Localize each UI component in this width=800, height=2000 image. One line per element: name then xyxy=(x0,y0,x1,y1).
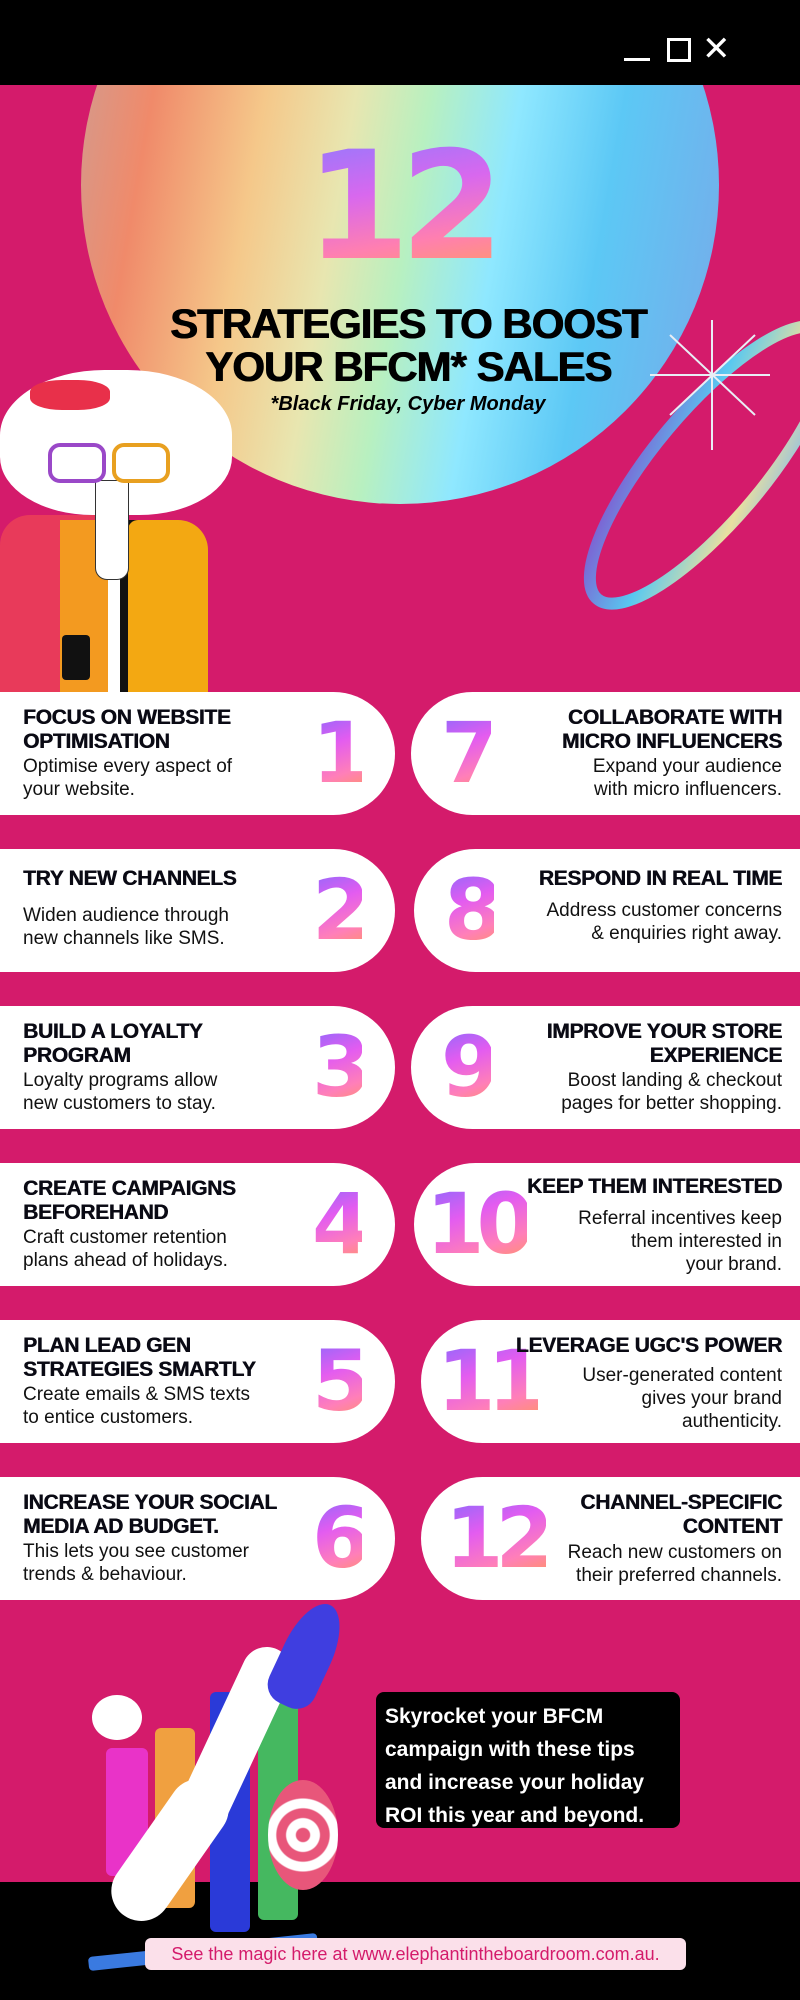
callout: and increase your holiday xyxy=(385,1771,644,1794)
card 1: FOCUS ON WEBSITE xyxy=(23,706,231,729)
card 12: 12 xyxy=(445,1489,546,1587)
card 2: new channels like SMS. xyxy=(23,928,225,949)
card 8: RESPOND IN REAL TIME xyxy=(539,867,782,890)
card 10 xyxy=(414,1163,800,1286)
card 12 xyxy=(421,1477,800,1600)
card 10: 10 xyxy=(426,1175,527,1273)
card 7: with micro influencers. xyxy=(594,779,782,800)
card 8: & enquiries right away. xyxy=(591,923,782,944)
card 11: gives your brand xyxy=(642,1388,782,1409)
card 4: 4 xyxy=(312,1175,362,1273)
card 4: CREATE CAMPAIGNS xyxy=(23,1177,236,1200)
card 1 xyxy=(0,692,395,815)
ring decoration xyxy=(584,320,800,610)
card 7: 7 xyxy=(441,704,491,802)
card 5 xyxy=(0,1320,395,1443)
card 7: COLLABORATE WITH xyxy=(568,706,782,729)
card 9: Boost landing & checkout xyxy=(568,1070,782,1091)
card 10: Referral incentives keep xyxy=(578,1208,782,1229)
card 12: Reach new customers on xyxy=(568,1542,782,1563)
callout: campaign with these tips xyxy=(385,1738,635,1761)
bottom black bar xyxy=(0,1882,800,2000)
card 12: CHANNEL-SPECIFIC xyxy=(580,1491,782,1514)
card 11: User-generated content xyxy=(582,1365,782,1386)
card 2: 2 xyxy=(312,861,362,959)
card 3: BUILD A LOYALTY xyxy=(23,1020,202,1043)
card 5: to entice customers. xyxy=(23,1407,193,1428)
card 12: their preferred channels. xyxy=(576,1565,782,1586)
link bar xyxy=(145,1938,686,1970)
subtitle: *Black Friday, Cyber Monday xyxy=(271,393,545,415)
card 10: them interested in xyxy=(631,1231,782,1252)
card 11 xyxy=(421,1320,800,1443)
card 1: your website. xyxy=(23,779,135,800)
card 11: authenticity. xyxy=(682,1411,782,1432)
card 4: plans ahead of holidays. xyxy=(23,1250,228,1271)
card 3: 3 xyxy=(312,1018,362,1116)
card 9: pages for better shopping. xyxy=(561,1093,782,1114)
window icons xyxy=(624,30,730,68)
card 2: TRY NEW CHANNELS xyxy=(23,867,236,890)
window icons: ✕ xyxy=(702,30,730,68)
card 12: CONTENT xyxy=(683,1515,782,1538)
card 3: new customers to stay. xyxy=(23,1093,216,1114)
card 1: 1 xyxy=(312,704,362,802)
card 8: 8 xyxy=(444,861,494,959)
card 9: IMPROVE YOUR STORE xyxy=(547,1020,782,1043)
big 12: 12 xyxy=(306,120,494,294)
card 10: your brand. xyxy=(686,1254,782,1275)
card 8: Address customer concerns xyxy=(546,900,782,921)
top black bar xyxy=(0,0,800,85)
card 1: OPTIMISATION xyxy=(23,730,170,753)
card 2 xyxy=(0,849,395,972)
star burst xyxy=(650,320,770,450)
callout xyxy=(376,1692,680,1828)
holographic circle xyxy=(81,0,719,504)
callout: Skyrocket your BFCM xyxy=(385,1705,603,1728)
title xyxy=(170,300,648,390)
link bar: See the magic here at www.elephantintheboardroom.com.au. xyxy=(171,1944,660,1964)
card 7 xyxy=(411,692,800,815)
card 11: 11 xyxy=(437,1332,538,1430)
card 7: Expand your audience xyxy=(593,756,782,777)
elephant illustration xyxy=(0,370,232,692)
card 9: EXPERIENCE xyxy=(650,1044,782,1067)
card 4: BEFOREHAND xyxy=(23,1201,168,1224)
title: STRATEGIES TO BOOST xyxy=(170,300,646,347)
card 2: Widen audience through xyxy=(23,905,229,926)
card 6: trends & behaviour. xyxy=(23,1564,187,1585)
title: YOUR BFCM* SALES xyxy=(205,343,611,390)
card 11: LEVERAGE UGC'S POWER xyxy=(516,1334,782,1357)
card 3: Loyalty programs allow xyxy=(23,1070,217,1091)
callout: ROI this year and beyond. xyxy=(385,1804,644,1827)
card 6: This lets you see customer xyxy=(23,1541,249,1562)
card 9 xyxy=(411,1006,800,1129)
rocket chart illustration xyxy=(88,1604,340,1971)
card 5: Create emails & SMS texts xyxy=(23,1384,250,1405)
card 7: MICRO INFLUENCERS xyxy=(562,730,782,753)
card 9: 9 xyxy=(441,1018,491,1116)
card 8 xyxy=(414,849,800,972)
card 5: PLAN LEAD GEN xyxy=(23,1334,191,1357)
card 6: MEDIA AD BUDGET. xyxy=(23,1515,218,1538)
card 6 xyxy=(0,1477,395,1600)
card 5: 5 xyxy=(312,1332,362,1430)
card 10: KEEP THEM INTERESTED xyxy=(527,1175,782,1198)
card 4 xyxy=(0,1163,395,1286)
card 4: Craft customer retention xyxy=(23,1227,227,1248)
card 3 xyxy=(0,1006,395,1129)
card 6: 6 xyxy=(312,1489,362,1587)
card 3: PROGRAM xyxy=(23,1044,131,1067)
card 5: STRATEGIES SMARTLY xyxy=(23,1358,256,1381)
card 1: Optimise every aspect of xyxy=(23,756,232,777)
card 6: INCREASE YOUR SOCIAL xyxy=(23,1491,277,1514)
